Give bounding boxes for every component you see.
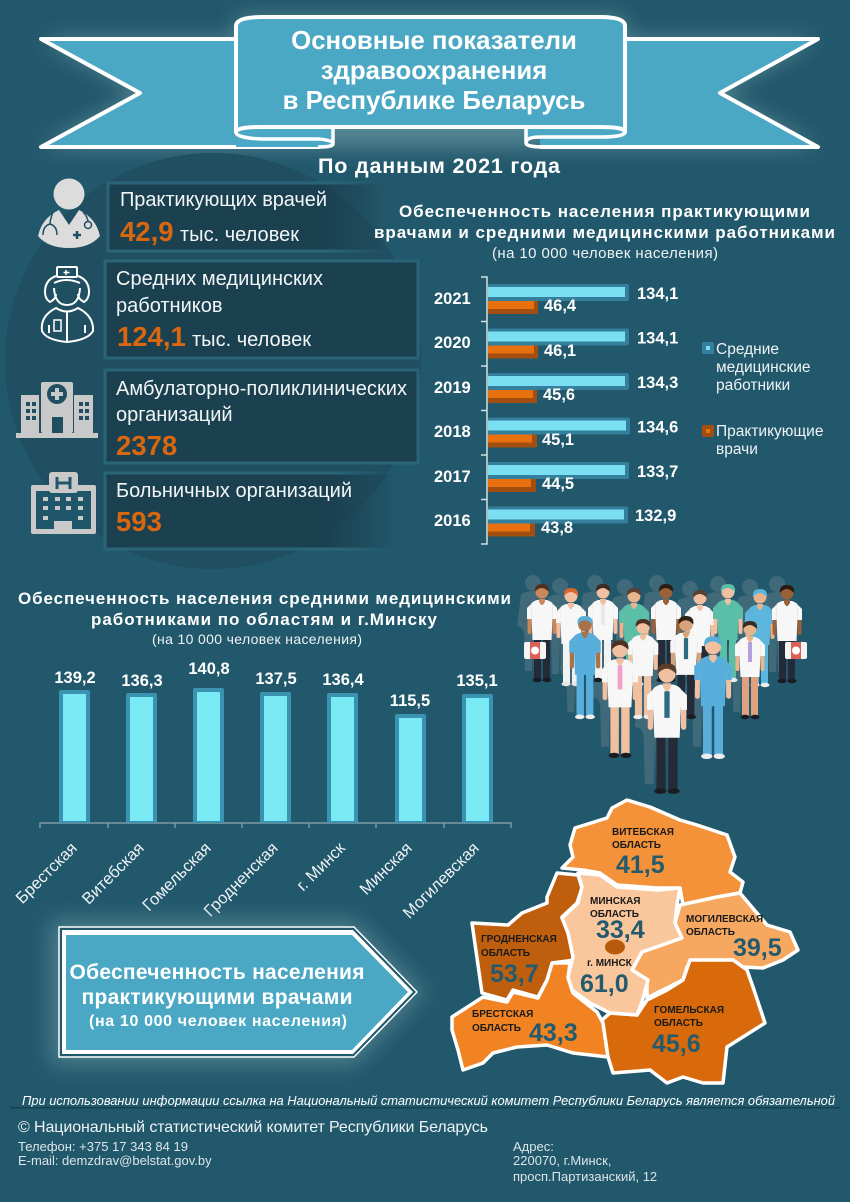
column: Vitebsk: 136,3 — [121, 672, 163, 690]
map labels — [472, 827, 782, 1058]
map of Belarus — [452, 800, 798, 1083]
illustration: group of medical staff — [517, 575, 807, 794]
panel: outpatient organisations: Амбулаторно-поликлинических — [116, 378, 407, 400]
map labels: ОБЛАСТЬ — [472, 1023, 521, 1034]
map labels: 33,4 — [596, 916, 645, 944]
column: Minsk city — [293, 671, 364, 895]
column: Vitebsk — [79, 672, 163, 908]
arrow sign — [59, 927, 417, 1057]
row 2019: 134,3 — [637, 374, 678, 392]
row 2016: 132,9 — [635, 507, 676, 525]
column chart: regions — [12, 660, 511, 922]
column: Mogilev: Могилевская — [400, 839, 483, 922]
row 2017: 133,7 — [637, 463, 678, 481]
column: Brest — [12, 669, 96, 908]
column: Gomel: 140,8 — [188, 660, 230, 678]
row 2016 — [434, 506, 676, 537]
map labels: ВИТЕБСКАЯ — [612, 827, 674, 838]
row 2020: 2020 — [434, 334, 471, 352]
panel: outpatient organisations: 2378 — [116, 430, 177, 461]
legend — [702, 341, 823, 458]
central panel — [236, 17, 625, 132]
right curl — [526, 127, 625, 147]
right tail — [540, 39, 818, 147]
column: Minsk city: г. Минск — [293, 839, 349, 895]
title ribbon — [41, 17, 818, 147]
legend: Средние — [716, 341, 779, 358]
fold fills — [236, 127, 625, 147]
column: Mogilev: 135,1 — [456, 672, 498, 690]
column: Minsk city: 136,4 — [322, 671, 364, 689]
map labels: ОБЛАСТЬ — [654, 1018, 703, 1029]
region: Gomel — [602, 960, 765, 1083]
panel: practising doctors: 42,9 — [120, 216, 174, 247]
region: Mogilev — [630, 893, 798, 998]
left tail — [41, 39, 320, 147]
map labels: 45,6 — [652, 1030, 701, 1058]
row 2017: 44,5 — [542, 475, 574, 493]
chart title: provision by region: работниками по областям и г.Минску — [91, 610, 438, 629]
region: Brest — [452, 963, 608, 1070]
left curl — [236, 127, 333, 147]
arrow sign: (на 10 000 человек населения) — [89, 1013, 347, 1030]
icon: nurse — [42, 267, 93, 342]
panel: practising doctors: Практикующих врачей — [120, 189, 327, 211]
usage note: При использовании информации ссылка на Национальный статистический комитет Республики Беларусь является обязательной — [22, 1093, 835, 1108]
column: Grodno — [201, 670, 297, 920]
map labels: 39,5 — [733, 934, 782, 962]
chart title: provision by region — [18, 589, 511, 647]
row 2016: 2016 — [434, 512, 471, 530]
row 2019 — [434, 373, 678, 404]
footer: contacts: Телефон: +375 17 343 84 19 — [18, 1139, 188, 1154]
row 2021: 2021 — [434, 290, 471, 308]
column: Brest: 139,2 — [54, 669, 96, 687]
row 2021 — [434, 284, 678, 315]
chart title: provision by region: (на 10 000 человек населения) — [152, 631, 362, 647]
row 2019: 45,6 — [543, 386, 575, 404]
chart title: provision by year: врачами и средними медицинскими работниками — [374, 223, 835, 242]
footer: address: 220070, г.Минск, — [513, 1153, 611, 1168]
region: Vitebsk — [562, 800, 743, 905]
icon: hospital — [31, 472, 96, 534]
map labels: 43,3 — [529, 1019, 578, 1047]
panel: hospitals — [105, 473, 400, 549]
title text: в Республике Беларусь — [283, 87, 585, 115]
subtitle: По данным 2021 года — [318, 154, 561, 178]
panel: hospitals: Больничных организаций — [116, 480, 352, 502]
horizontal bar chart — [434, 277, 678, 544]
map labels: ОБЛАСТЬ — [481, 948, 530, 959]
row 2018 — [434, 418, 678, 449]
row 2020 — [434, 328, 678, 360]
region: Minsk — [562, 873, 682, 1015]
panel: nurses — [105, 261, 418, 358]
column: Minsk region — [356, 692, 430, 899]
row 2020: 46,1 — [544, 342, 576, 360]
panel: nurses: тыс. человек — [192, 329, 311, 351]
row 2017 — [434, 462, 678, 493]
row 2016: 43,8 — [541, 519, 573, 537]
ribbon glow — [41, 17, 818, 147]
legend: врачи — [716, 441, 758, 458]
legend: медицинские — [716, 359, 811, 376]
column: Vitebsk: Витебская — [79, 839, 148, 908]
legend: Практикующие — [716, 423, 823, 440]
arrow sign: практикующими врачами — [82, 986, 352, 1009]
panel: practising doctors: тыс. человек — [180, 224, 299, 246]
column: Grodno: 137,5 — [255, 670, 297, 688]
title text: здравоохранения — [321, 57, 547, 85]
map labels: МОГИЛЕВСКАЯ — [686, 914, 763, 925]
column: Brest: Брестская — [12, 839, 81, 908]
Minsk city — [605, 940, 625, 954]
row 2017: 2017 — [434, 468, 471, 486]
footer: contacts: E-mail: demzdrav@belstat.gov.by — [18, 1153, 212, 1168]
title text: Основные показатели — [291, 27, 577, 55]
map labels: 53,7 — [490, 960, 539, 988]
row 2018: 45,1 — [542, 431, 574, 449]
map labels: МИНСКАЯ — [590, 896, 640, 907]
map labels: ОБЛАСТЬ — [590, 909, 639, 920]
panel: outpatient organisations — [105, 370, 418, 463]
arrow glow — [50, 920, 425, 1065]
icon: outpatient clinic — [16, 382, 98, 438]
column: Grodno: Гродненская — [201, 839, 282, 920]
panel: nurses: Средних медицинских — [116, 268, 323, 290]
map labels: ГОМЕЛЬСКАЯ — [654, 1005, 724, 1016]
column: Minsk region: 115,5 — [390, 692, 430, 710]
footer: publisher: © Национальный статистический комитет Республики Беларусь — [18, 1119, 488, 1136]
chart title: provision by year — [374, 202, 835, 262]
column: Gomel: Гомельская — [139, 839, 215, 915]
arrow sign: Обеспеченность населения — [70, 961, 364, 984]
footer: address: просп.Партизанский, 12 — [513, 1169, 657, 1184]
row 2018: 134,6 — [637, 418, 678, 436]
column: Mogilev — [400, 672, 498, 922]
panel: outpatient organisations: организаций — [116, 404, 233, 426]
map labels: 61,0 — [580, 970, 629, 998]
map labels: ОБЛАСТЬ — [612, 840, 661, 851]
icon: doctor — [38, 178, 100, 248]
column: Minsk region: Минская — [356, 839, 416, 899]
map labels: ГРОДНЕНСКАЯ — [481, 934, 557, 945]
row 2020: 134,1 — [637, 330, 678, 348]
panel: nurses: работников — [116, 295, 222, 317]
region: Grodno — [472, 873, 582, 1000]
row 2021: 134,1 — [637, 285, 678, 303]
panel: hospitals: 593 — [116, 506, 162, 537]
row 2021: 46,4 — [544, 297, 577, 315]
map labels: БРЕСТСКАЯ — [472, 1009, 533, 1020]
row 2018: 2018 — [434, 423, 471, 441]
chart title: provision by year: Обеспеченность населения практикующими — [399, 202, 810, 221]
row 2019: 2019 — [434, 379, 471, 397]
panel: nurses: 124,1 — [117, 321, 186, 352]
panel: practising doctors — [108, 183, 390, 251]
column: Gomel — [139, 660, 230, 915]
legend: работники — [716, 377, 790, 394]
chart title: provision by year: (на 10 000 человек населения) — [492, 245, 718, 262]
dark circle backdrop — [5, 153, 421, 569]
map labels: г. МИНСК — [587, 958, 633, 969]
map labels: ОБЛАСТЬ — [686, 927, 735, 938]
chart title: provision by region: Обеспеченность населения средними медицинскими — [18, 589, 511, 608]
map labels: 41,5 — [616, 851, 665, 879]
footer: address: Адрес: — [513, 1139, 554, 1154]
